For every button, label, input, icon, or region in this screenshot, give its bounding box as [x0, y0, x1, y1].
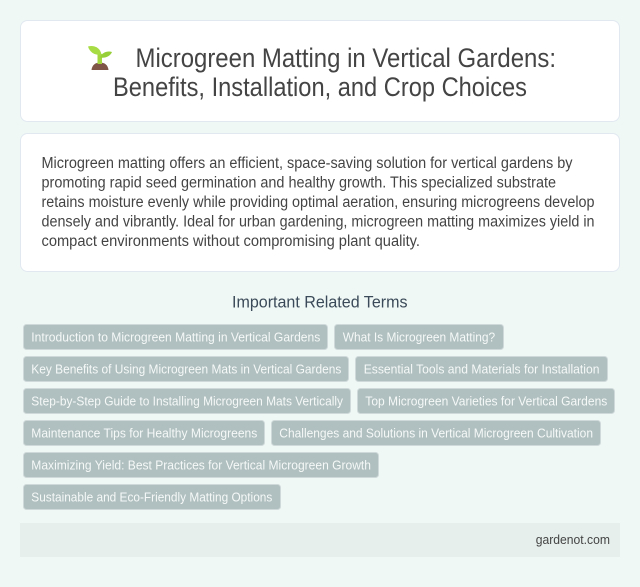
- intro text: [42, 155, 594, 250]
- intro text: promoting rapid seed germination and healthy growth. This specialized substrate: [42, 174, 556, 192]
- title: Microgreen Matting in Vertical Gardens:: [136, 43, 556, 73]
- footer source: gardenot.com: [536, 532, 610, 547]
- tag: Sustainable and Eco-Friendly Matting Options: [31, 490, 273, 504]
- tag: [24, 356, 348, 382]
- panel: title card: [20, 20, 620, 122]
- tag: Maintenance Tips for Healthy Microgreens: [31, 426, 258, 440]
- tag: Key Benefits of Using Microgreen Mats in Vertical Gardens: [31, 362, 342, 376]
- tag: [24, 324, 328, 350]
- tag: [24, 484, 280, 510]
- tag: Essential Tools and Materials for Installation: [364, 362, 600, 376]
- tag: [24, 388, 350, 414]
- tag: [334, 324, 504, 350]
- footer bar: [20, 523, 620, 557]
- tag: [356, 356, 608, 382]
- heading: important related terms: Important Related Terms: [232, 292, 408, 312]
- title: [113, 43, 556, 102]
- tag: Step-by-Step Guide to Installing Microgreen Mats Vertically: [31, 394, 343, 408]
- intro text: Microgreen matting offers an efficient, space-saving solution for vertical gardens by: [42, 155, 573, 172]
- tag: What Is Microgreen Matting?: [343, 330, 495, 344]
- tag: Challenges and Solutions in Vertical Microgreen Cultivation: [279, 426, 593, 440]
- tag: [358, 388, 614, 414]
- tag: [24, 452, 378, 478]
- tag: [24, 420, 264, 446]
- panel: related term tags: [24, 324, 614, 510]
- tag: Introduction to Microgreen Matting in Vertical Gardens: [31, 330, 321, 344]
- intro text: retains moisture evenly while providing optimal aeration, ensuring microgreens develop: [42, 194, 594, 211]
- icon: seedling: [88, 46, 112, 70]
- title: Benefits, Installation, and Crop Choices: [113, 72, 527, 102]
- intro text: densely and vibrantly. Ideal for urban gardening, microgreen matting maximizes yield in: [42, 214, 594, 230]
- panel: intro paragraph: [20, 134, 620, 272]
- intro text: compact environments without compromising plant quality.: [42, 233, 420, 250]
- tag: Top Microgreen Varieties for Vertical Gardens: [365, 394, 608, 408]
- tag: [272, 420, 600, 446]
- tag: Maximizing Yield: Best Practices for Vertical Microgreen Growth: [31, 458, 371, 472]
